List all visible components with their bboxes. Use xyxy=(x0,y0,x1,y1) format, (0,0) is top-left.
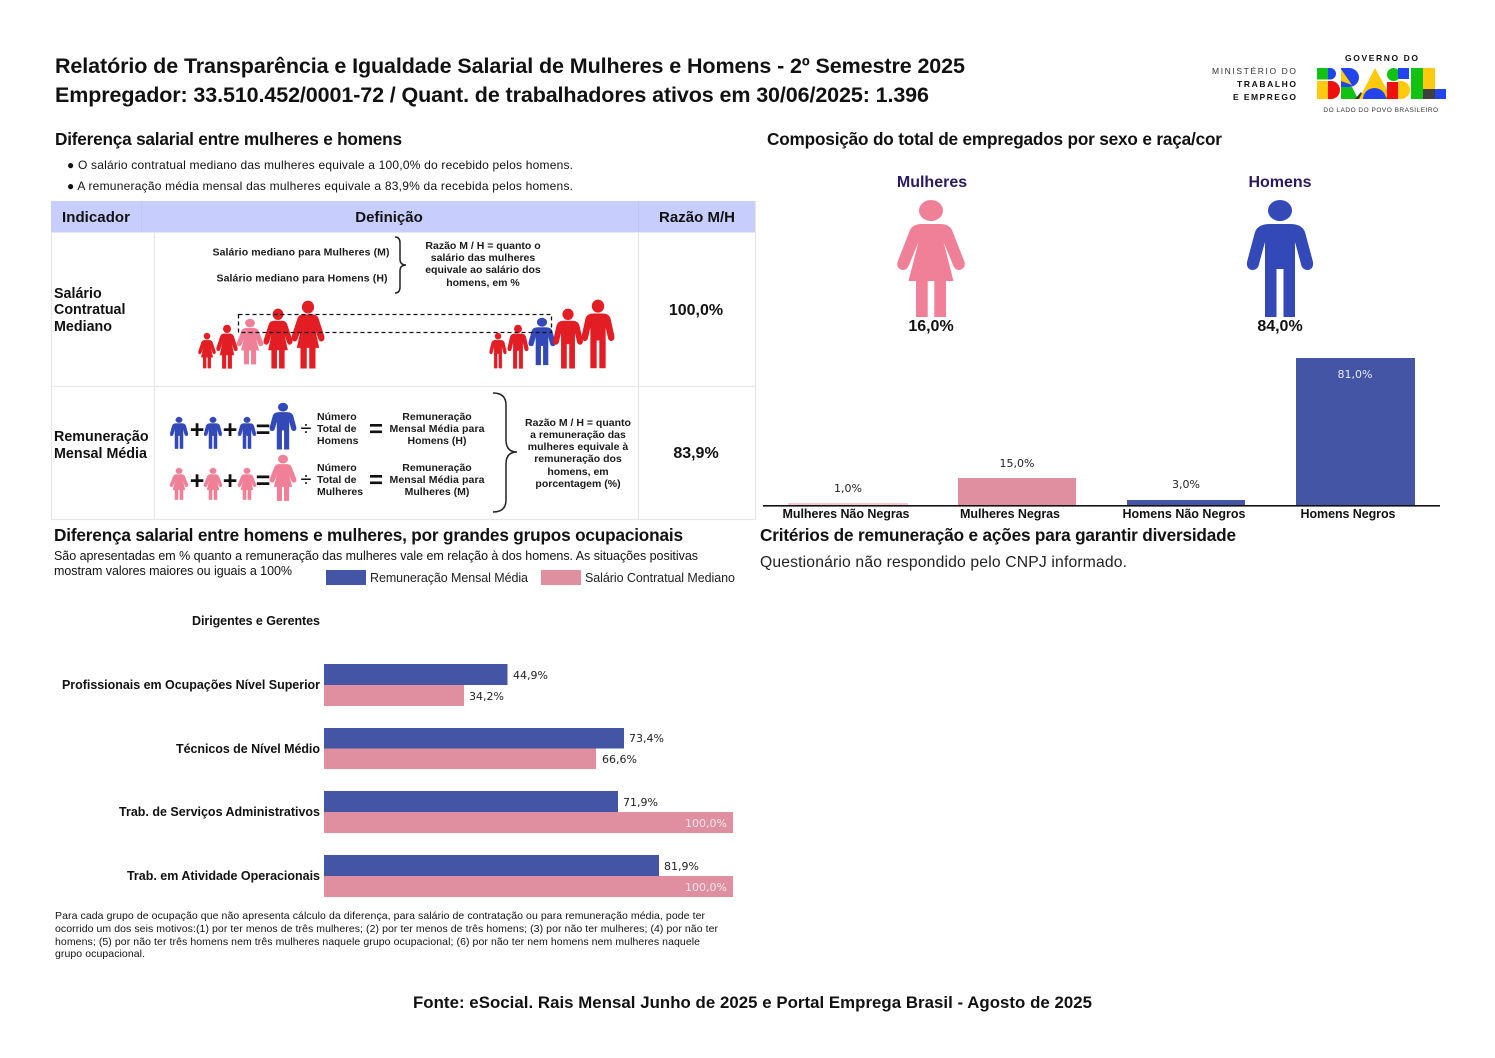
group: serviços administrativos: 100,0% xyxy=(685,817,727,830)
icon: família de homens xyxy=(490,300,614,368)
equation: homens: Mensal Média para xyxy=(390,423,485,435)
row: salário contratual mediano: Salário xyxy=(54,286,102,302)
icon: mulheres 16,0%: 16,0% xyxy=(908,318,954,335)
group: atividade operacionais: 81,9% xyxy=(664,860,699,873)
text block: bullets xyxy=(67,158,573,193)
definition text: salário mediano: equivale ao salário dos xyxy=(425,264,541,276)
bar chart: composição por raça/cor: 1,0% xyxy=(834,482,862,495)
equation: mulheres: Mulheres (M) xyxy=(405,486,469,498)
logo: ministério do trabalho e emprego: MINISTÉRIO DO xyxy=(1212,66,1296,76)
bar chart: composição por raça/cor: 3,0% xyxy=(1172,478,1200,491)
bar chart: composição por raça/cor xyxy=(763,358,1440,521)
icon: homens 84,0%: 84,0% xyxy=(1257,318,1303,335)
text block: explicação: São apresentadas em % quanto a remuneração das mulheres vale em relação à dos homens. As situações positivas xyxy=(54,549,698,563)
row: salário contratual mediano: 100,0% xyxy=(669,302,723,319)
text block: bullets: ● O salário contratual mediano das mulheres equivale a 100,0% do recebido pelos homens. xyxy=(67,158,573,172)
text block: nota de rodapé: ocorrido um dos seis motivos:(1) por ter menos de três mulheres; (2) por ter menos de três homens; (3) por não ter mulheres; (4) por não ter xyxy=(55,923,718,935)
group: técnicos de nível médio xyxy=(176,728,664,769)
equation: homens: Remuneração xyxy=(402,411,472,423)
equation: mulheres xyxy=(170,455,485,501)
text block: explicação xyxy=(54,549,698,578)
equation: mulheres: Número xyxy=(317,462,357,474)
definition text: razão remuneração xyxy=(493,393,631,512)
row: remuneração mensal média xyxy=(54,429,719,462)
table header: Indicador xyxy=(62,209,130,226)
group: profissionais nível superior: Profissionais em Ocupações Nível Superior xyxy=(62,678,320,692)
bar chart: composição por raça/cor: Homens Não Negros xyxy=(1122,507,1246,521)
equation: homens: Homens (H) xyxy=(408,435,466,447)
logo: governo do brasil: DO LADO DO POVO BRASILEIRO xyxy=(1323,107,1439,114)
row: remuneração mensal média: Mensal Média xyxy=(54,446,148,462)
logo: governo do brasil xyxy=(1317,53,1446,114)
definition text: razão remuneração: homens, em xyxy=(547,466,609,478)
equation: homens: Total de xyxy=(317,423,357,435)
heading: grupos ocupacionais: Diferença salarial entre homens e mulheres, por grandes grupos ocupacionais xyxy=(54,525,683,545)
equation: homens: Número xyxy=(317,411,357,423)
group: profissionais nível superior: 34,2% xyxy=(469,690,504,703)
equation: mulheres: + xyxy=(223,467,237,495)
group: serviços administrativos xyxy=(119,791,733,833)
group: profissionais nível superior xyxy=(62,664,548,706)
equation: mulheres: Remuneração xyxy=(402,462,472,474)
logo: governo do brasil: GOVERNO DO xyxy=(1345,53,1418,63)
row: remuneração mensal média: Remuneração xyxy=(54,429,149,445)
group: serviços administrativos: Trab. de Serviços Administrativos xyxy=(119,805,320,819)
equation: homens: + xyxy=(223,416,237,444)
icon: mulheres 16,0% xyxy=(897,174,967,335)
equation: mulheres: = xyxy=(369,467,383,494)
text block: nota de rodapé xyxy=(55,910,718,960)
definition text: razão remuneração: remuneração dos xyxy=(534,453,622,465)
group: técnicos de nível médio: Técnicos de Nível Médio xyxy=(176,742,320,756)
logo: ministério do trabalho e emprego xyxy=(1212,66,1296,102)
legend: Remuneração Mensal Média xyxy=(370,571,528,585)
equation: homens: = xyxy=(256,416,270,444)
definition text: salário mediano: Salário mediano para Mulheres (M) xyxy=(212,246,390,258)
definition text: salário mediano xyxy=(212,237,541,293)
bar chart: composição por raça/cor: Mulheres Negras xyxy=(960,507,1060,521)
row: salário contratual mediano xyxy=(54,286,723,335)
definition text: razão remuneração: a remuneração das xyxy=(530,429,626,441)
definition text: razão remuneração: Razão M / H = quanto xyxy=(525,417,631,429)
equation: homens xyxy=(170,403,485,449)
panel: tabela de indicadores xyxy=(51,201,756,520)
icon: mulheres 16,0%: Mulheres xyxy=(897,174,967,191)
legend xyxy=(326,570,735,585)
group: técnicos de nível médio: 73,4% xyxy=(629,732,664,745)
bar chart: grupos ocupacionais xyxy=(62,614,733,897)
logo: ministério do trabalho e emprego: TRABALHO xyxy=(1237,79,1296,89)
heading: critérios: Critérios de remuneração e ações para garantir diversidade xyxy=(760,525,1236,545)
group: profissionais nível superior: 44,9% xyxy=(513,669,548,682)
text block: nota de rodapé: Para cada grupo de ocupação que não apresenta cálculo da diferença, para salário de contratação ou para remuneração média, pode ter xyxy=(55,910,706,922)
row: salário contratual mediano: Contratual xyxy=(54,302,126,318)
table header: Definição xyxy=(355,209,423,226)
equation: homens: = xyxy=(369,416,383,443)
heading: diferença salarial: Diferença salarial entre mulheres e homens xyxy=(55,129,402,149)
group: dirigentes e gerentes: Dirigentes e Gerentes xyxy=(192,614,320,628)
bar chart: composição por raça/cor: Homens Negros xyxy=(1300,507,1396,521)
definition text: salário mediano: Razão M / H = quanto o xyxy=(425,240,541,252)
title: Relatório de Transparência e Igualdade Salarial de Mulheres e Homens - 2º Semestre 2025 xyxy=(55,54,965,78)
definition text: salário mediano: salário das mulheres xyxy=(431,252,535,264)
definition text: salário mediano: Salário mediano para Homens (H) xyxy=(216,272,388,284)
group: técnicos de nível médio: 66,6% xyxy=(602,753,637,766)
equation: mulheres: ÷ xyxy=(301,469,312,491)
row: remuneração mensal média: 83,9% xyxy=(673,445,719,462)
heading: composição: Composição do total de empregados por sexo e raça/cor xyxy=(767,129,1222,149)
text block: nota de rodapé: homens; (5) por não ter três homens nem três mulheres naquele grupo ocupacional; (6) por não ter nem homens nem mulheres naquele xyxy=(55,936,700,948)
bar chart: composição por raça/cor: Mulheres Não Negras xyxy=(782,507,910,521)
equation: homens: Homens xyxy=(317,435,359,447)
logo: ministério do trabalho e emprego: E EMPREGO xyxy=(1233,92,1296,102)
definition text: razão remuneração: porcentagem (%) xyxy=(535,478,621,490)
definition text: razão remuneração: mulheres equivale à xyxy=(528,441,628,453)
text block: nota de rodapé: grupo ocupacional. xyxy=(55,948,145,960)
icon: homens 84,0% xyxy=(1247,174,1313,335)
equation: mulheres: Total de xyxy=(317,474,357,486)
icon: família de mulheres xyxy=(198,301,324,368)
group: serviços administrativos: 71,9% xyxy=(623,796,658,809)
equation: mulheres: = xyxy=(256,467,270,495)
text block: bullets: ● A remuneração média mensal das mulheres equivale a 83,9% da recebida pelos homens. xyxy=(67,179,573,193)
equation: mulheres: + xyxy=(190,467,204,495)
icon: homens 84,0%: Homens xyxy=(1248,174,1312,191)
bar chart: composição por raça/cor: 81,0% xyxy=(1338,368,1372,381)
group: atividade operacionais xyxy=(127,855,733,897)
row: salário contratual mediano: Mediano xyxy=(54,319,112,335)
text block: explicação: mostram valores maiores ou iguais a 100% xyxy=(54,564,292,578)
table header xyxy=(51,201,755,232)
legend: Salário Contratual Mediano xyxy=(585,571,735,585)
equation: mulheres: Mensal Média para xyxy=(390,474,485,486)
text block: questionário: Questionário não respondido pelo CNPJ informado. xyxy=(760,554,1127,571)
group: atividade operacionais: Trab. em Atividade Operacionais xyxy=(127,869,320,883)
equation: homens: ÷ xyxy=(301,418,312,440)
group: atividade operacionais: 100,0% xyxy=(685,881,727,894)
equation: homens: + xyxy=(190,416,204,444)
equation: mulheres: Mulheres xyxy=(317,486,363,498)
title: Empregador: 33.510.452/0001-72 / Quant. de trabalhadores ativos em 30/06/2025: 1.396 xyxy=(55,83,929,107)
table header: Razão M/H xyxy=(659,209,735,226)
definition text: salário mediano: homens, em % xyxy=(446,277,520,289)
title xyxy=(55,54,965,107)
footer: fonte: Fonte: eSocial. Rais Mensal Junho de 2025 e Portal Emprega Brasil - Agosto de 2025 xyxy=(413,993,1092,1012)
bar chart: composição por raça/cor: 15,0% xyxy=(1000,457,1034,470)
